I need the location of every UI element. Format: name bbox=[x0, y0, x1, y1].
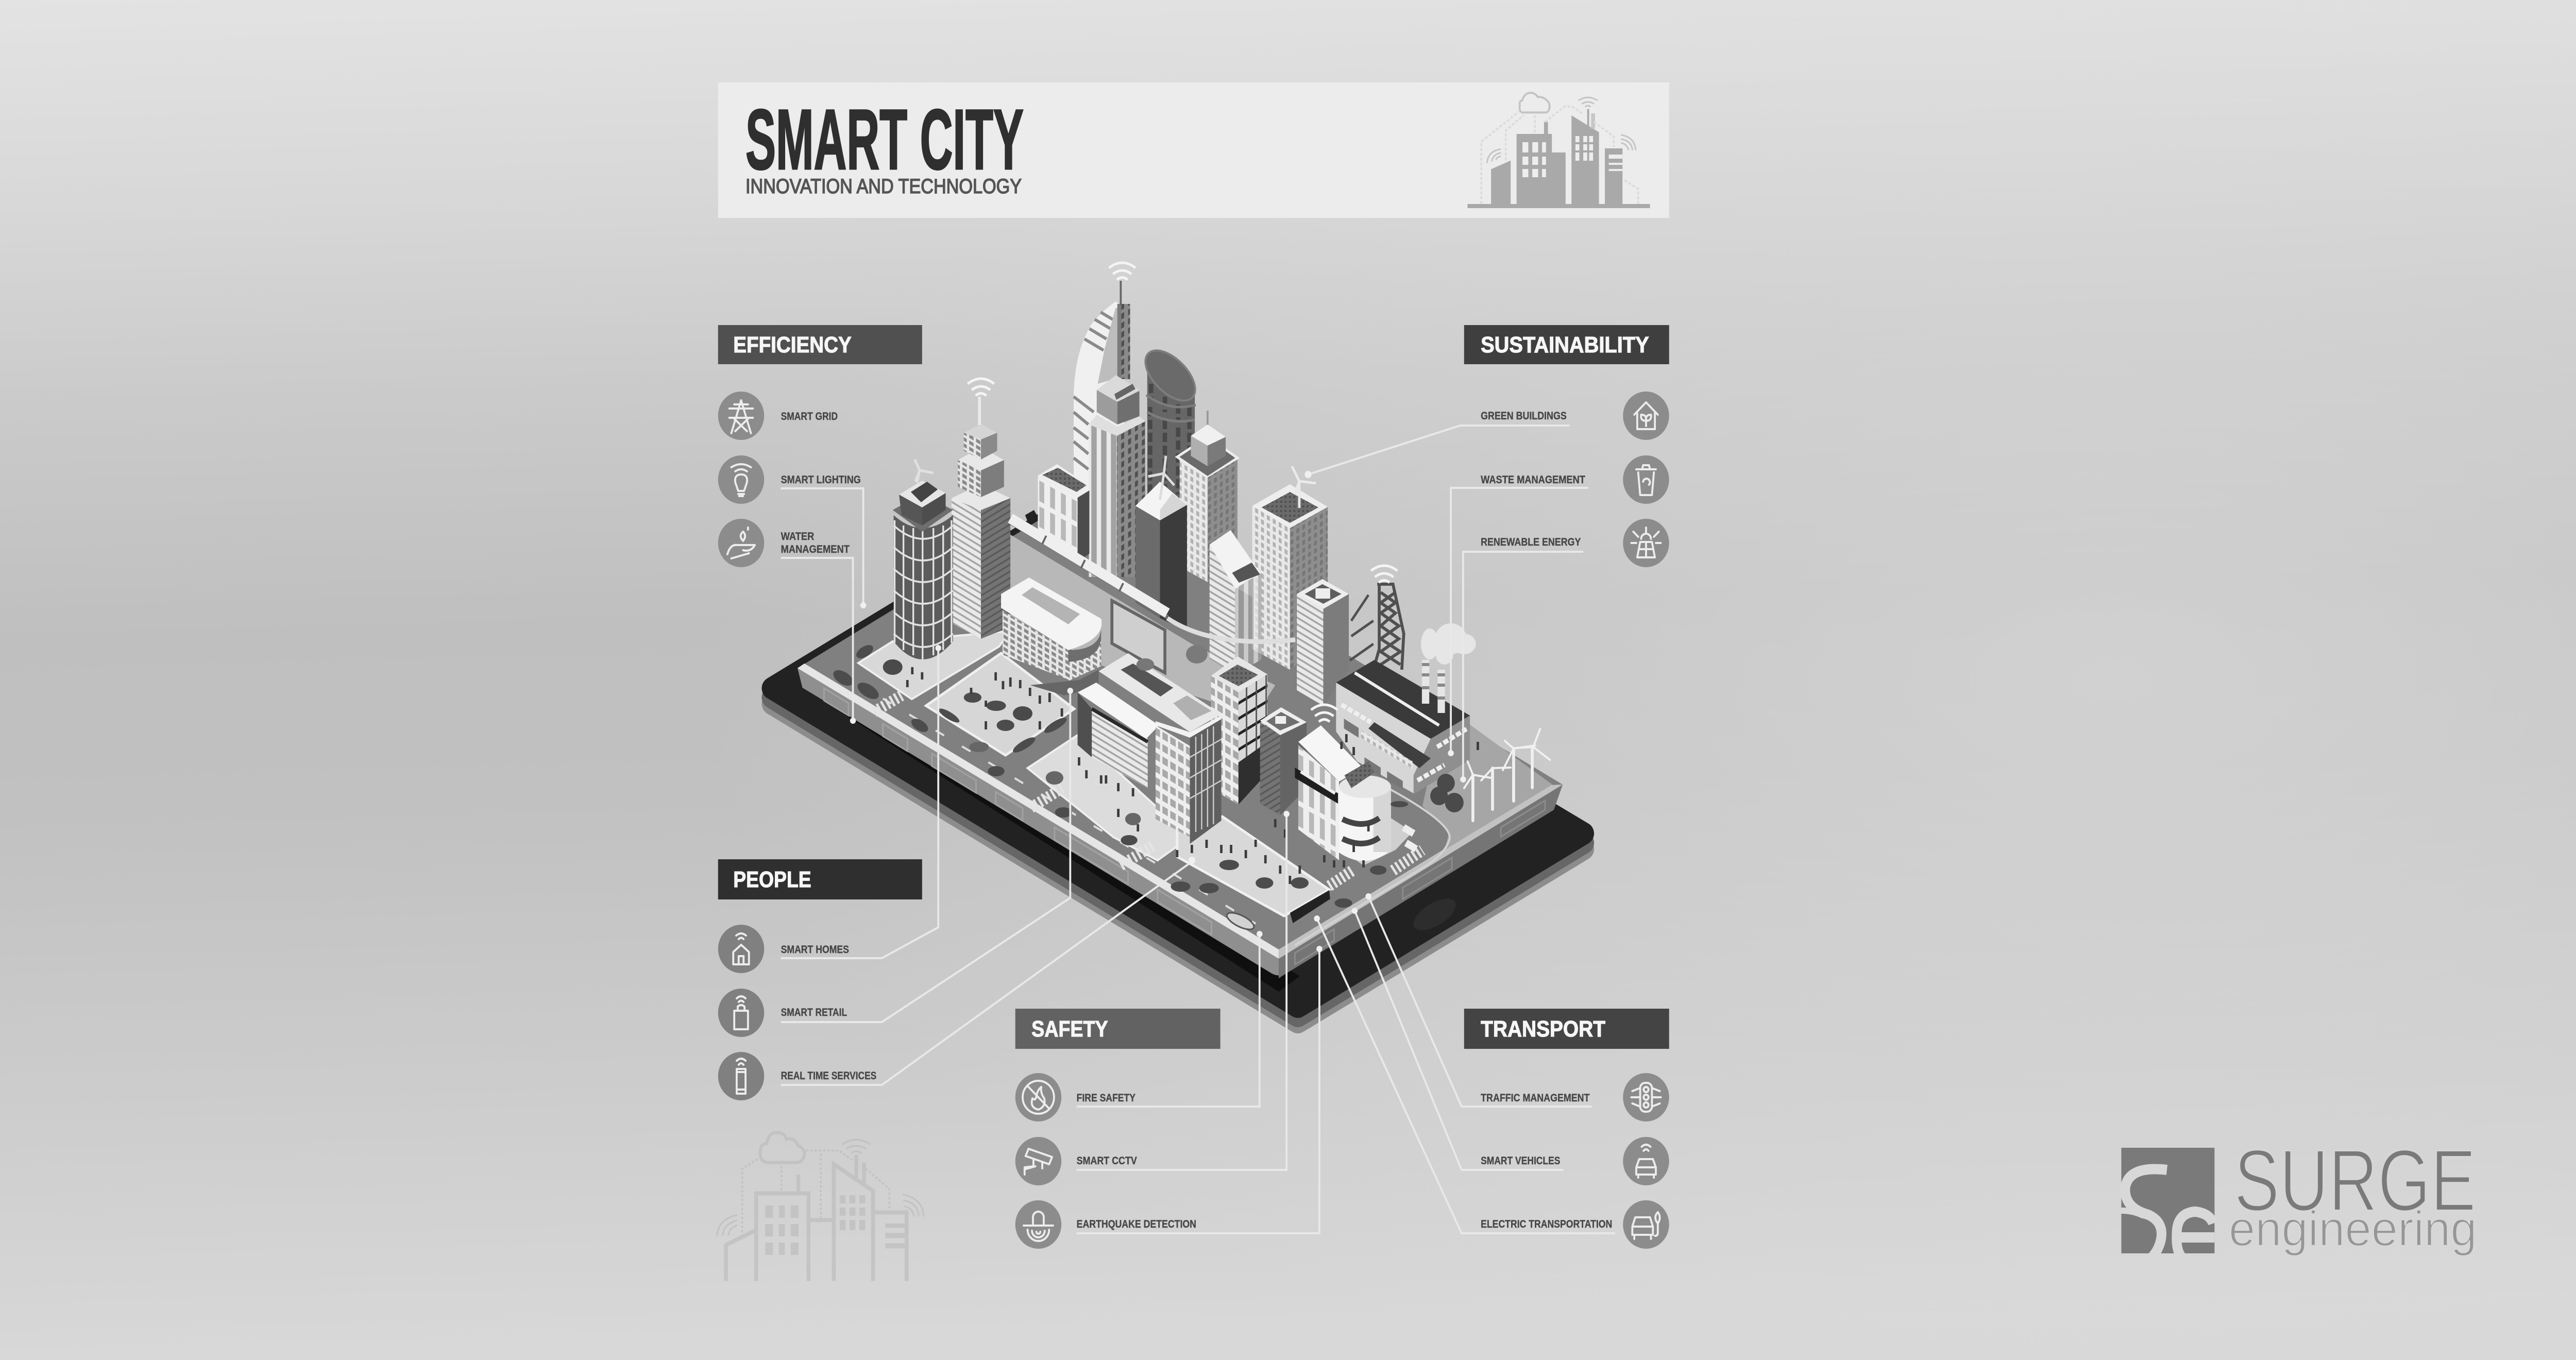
building: slanted white roof bbox=[1210, 530, 1262, 675]
item: smart retail: SMART RETAIL bbox=[781, 1007, 847, 1018]
header panel bbox=[718, 82, 1669, 218]
plaza C bbox=[1177, 817, 1329, 916]
heading: efficiency bbox=[718, 325, 922, 364]
road outline bbox=[1295, 788, 1450, 945]
item: traffic management bbox=[1481, 1073, 1669, 1121]
item: smart vehicles: SMART VEHICLES bbox=[1481, 1155, 1560, 1167]
plaza A bbox=[926, 653, 1074, 755]
smoke bbox=[1421, 623, 1476, 665]
item: smart retail bbox=[718, 989, 847, 1037]
road dashes bbox=[883, 699, 1256, 924]
subtitle: INNOVATION AND TECHNOLOGY bbox=[745, 175, 1022, 198]
leader: water management bbox=[781, 558, 853, 721]
item: green buildings bbox=[1481, 392, 1669, 440]
item: smart homes bbox=[718, 925, 849, 973]
item: smart vehicles bbox=[1481, 1137, 1669, 1185]
item: smart grid: SMART GRID bbox=[781, 411, 838, 422]
item: electric transportation bbox=[1481, 1200, 1669, 1249]
pedestrians bbox=[907, 667, 1478, 884]
monorail bbox=[1010, 510, 1295, 641]
leader: traffic management bbox=[1368, 896, 1591, 1107]
leader: smart vehicles bbox=[1354, 911, 1563, 1170]
car park bbox=[1334, 804, 1413, 865]
panel: efficiency bbox=[718, 325, 922, 567]
item: earthquake detection bbox=[1015, 1200, 1196, 1249]
item: renewable energy bbox=[1481, 519, 1669, 567]
plaza B bbox=[1027, 735, 1190, 860]
crosswalks bbox=[874, 695, 1422, 886]
platform shadow bbox=[803, 680, 1300, 992]
panel: sustainability bbox=[1464, 325, 1669, 567]
heading: safety: SAFETY bbox=[1031, 1016, 1108, 1042]
icon: roof turbine bbox=[1292, 466, 1316, 508]
item: real time services bbox=[718, 1052, 876, 1100]
logo wordmark: SURGE bbox=[2234, 1132, 2476, 1230]
bus: dark bbox=[1290, 890, 1330, 923]
platform rim bbox=[798, 664, 1279, 959]
tower: right back bbox=[1177, 411, 1238, 582]
chimneys bbox=[1422, 660, 1429, 704]
panel: people bbox=[718, 859, 922, 1100]
tower: green roof right bbox=[1252, 466, 1328, 670]
lawn bbox=[1422, 719, 1552, 850]
leader: smart lighting bbox=[781, 488, 863, 605]
city platform bbox=[798, 494, 1563, 992]
leader: green buildings bbox=[1308, 426, 1569, 474]
item: waste management bbox=[1481, 455, 1669, 504]
item: traffic management: TRAFFIC MANAGEMENT bbox=[1481, 1092, 1590, 1104]
leader lines bbox=[781, 426, 1615, 1233]
leader: waste management bbox=[1451, 488, 1588, 753]
item: earthquake detection: EARTHQUAKE DETECTION bbox=[1077, 1218, 1196, 1230]
trees bbox=[883, 645, 1464, 825]
panel: safety bbox=[1015, 1009, 1221, 1249]
building: lower wide bbox=[1078, 653, 1222, 788]
vehicles bbox=[831, 642, 1418, 933]
side detail bbox=[824, 688, 1545, 964]
heading: safety bbox=[1015, 1009, 1221, 1049]
leader: fire safety bbox=[1077, 934, 1260, 1107]
item: electric transportation: ELECTRIC TRANSPORTATION bbox=[1481, 1218, 1612, 1230]
tower: lower front bbox=[1156, 716, 1222, 844]
leader: smart homes bbox=[781, 648, 938, 958]
item: fire safety: FIRE SAFETY bbox=[1077, 1092, 1136, 1104]
item: water management bbox=[718, 519, 850, 567]
item: real time services: REAL TIME SERVICES bbox=[781, 1070, 876, 1082]
icon: black tower turbine bbox=[1148, 456, 1174, 500]
leader: smart retail bbox=[781, 691, 1070, 1022]
leader end dots bbox=[850, 471, 1466, 952]
tower: striped bbox=[1211, 656, 1267, 805]
item: smart homes: SMART HOMES bbox=[781, 944, 849, 956]
tower: pale stepped bbox=[952, 379, 1010, 639]
tower: cylindrical glass bbox=[893, 460, 953, 659]
icon: header city bbox=[1467, 93, 1650, 208]
icon: crown turbine bbox=[915, 460, 934, 483]
tower: black bbox=[1136, 456, 1187, 631]
building: white curved bbox=[1295, 725, 1391, 861]
tower: dark elliptical bbox=[1137, 342, 1204, 500]
building: white with roof garden bbox=[1038, 464, 1089, 562]
phone speaker bbox=[1409, 892, 1461, 937]
leader: electric transportation bbox=[1317, 919, 1615, 1233]
item: water management: WATER bbox=[781, 531, 815, 542]
heading: transport bbox=[1464, 1009, 1669, 1049]
item: fire safety bbox=[1015, 1073, 1136, 1121]
logo: surge engineering bbox=[2121, 1132, 2477, 1258]
courtyard pavilion bbox=[1112, 601, 1165, 673]
heading: transport: TRANSPORT bbox=[1481, 1016, 1605, 1042]
curved tube bbox=[1167, 618, 1295, 641]
phone bbox=[772, 517, 1583, 1022]
item: water management: MANAGEMENT bbox=[781, 543, 850, 555]
heading: people bbox=[718, 859, 922, 899]
bus: light bbox=[1225, 909, 1256, 933]
item: smart cctv: SMART CCTV bbox=[1077, 1155, 1137, 1167]
logo mark bbox=[2121, 1148, 2214, 1258]
platform side faces bbox=[798, 668, 1563, 976]
ghost city watermark bbox=[717, 1132, 924, 1281]
leader: renewable energy bbox=[1463, 552, 1583, 779]
leader: real time services bbox=[781, 863, 1190, 1085]
logo tagline: engineering bbox=[2229, 1201, 2477, 1256]
item: smart grid bbox=[718, 392, 838, 440]
item: green buildings: GREEN BUILDINGS bbox=[1481, 410, 1567, 422]
wind turbines bbox=[1464, 729, 1550, 821]
tower: thin light with teal roof bbox=[1297, 579, 1349, 706]
leader: earthquake detection bbox=[1077, 949, 1319, 1233]
heading: sustainability bbox=[1464, 325, 1669, 364]
city skyline bbox=[831, 263, 1550, 933]
heading: sustainability: SUSTAINABILITY bbox=[1481, 332, 1649, 358]
item: smart lighting bbox=[718, 455, 861, 504]
tower: white sail and central tower bbox=[1074, 263, 1145, 577]
heading: efficiency: EFFICIENCY bbox=[733, 332, 852, 358]
heading: people: PEOPLE bbox=[733, 867, 811, 892]
leader: smart cctv bbox=[1077, 814, 1286, 1170]
tower: thin grey bbox=[1260, 705, 1337, 815]
title: SMART CITY bbox=[745, 92, 1024, 188]
item: renewable energy: RENEWABLE ENERGY bbox=[1481, 536, 1581, 548]
icon: wifi on building bbox=[1311, 705, 1337, 722]
pylon bbox=[1350, 566, 1404, 670]
item: smart lighting: SMART LIGHTING bbox=[781, 474, 861, 486]
item: smart cctv bbox=[1015, 1137, 1137, 1185]
panel: transport bbox=[1464, 1009, 1669, 1249]
block under towers bbox=[858, 631, 1010, 699]
item: waste management: WASTE MANAGEMENT bbox=[1481, 474, 1585, 486]
building: long rounded bbox=[1001, 577, 1101, 695]
factory bbox=[1336, 623, 1476, 794]
courtyard bbox=[1006, 533, 1275, 716]
platform top bbox=[798, 494, 1563, 959]
